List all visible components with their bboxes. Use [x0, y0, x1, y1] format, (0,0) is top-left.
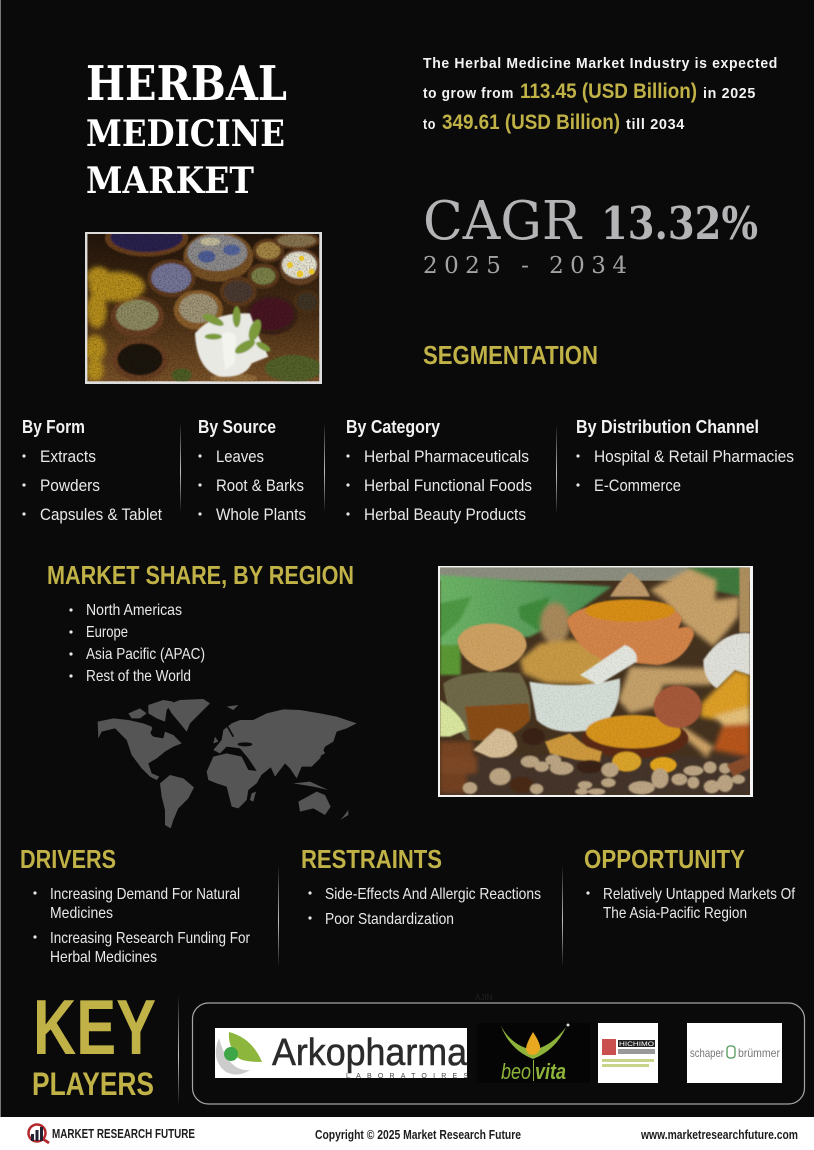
market growth statement — [423, 55, 778, 134]
CAGR figure: CAGR — [423, 191, 583, 252]
logo: Hichimo — [598, 1023, 658, 1083]
panel: drivers: Increasing Demand For Natural — [50, 886, 240, 903]
CAGR figure: 2025 - 2034 — [423, 253, 627, 279]
photo grain — [440, 567, 750, 795]
logo: beo vita: beo — [501, 1059, 531, 1084]
panel: restraints: Side-Effects And Allergic Reactions — [325, 886, 541, 903]
heading: market share by region: MARKET SHARE, BY REGION — [47, 560, 354, 590]
panel: drivers — [20, 844, 279, 967]
column: by source: Root & Barks — [216, 476, 304, 495]
heading: key players: KEY — [33, 983, 156, 1071]
column: by category: Herbal Functional Foods — [364, 476, 532, 495]
footer — [0, 1117, 814, 1150]
panel: drivers: DRIVERS — [20, 844, 116, 874]
panel: restraints: RESTRAINTS — [301, 844, 442, 874]
market growth statement: 113.45 (USD Billion) — [520, 80, 697, 103]
logo: beo vita — [477, 1023, 590, 1084]
segmentation columns — [22, 417, 794, 524]
panel: opportunity — [584, 844, 795, 922]
panel: restraints: Poor Standardization — [325, 911, 454, 928]
panel: drivers: Medicines — [50, 905, 113, 922]
logo: Arkopharma: Arkopharma — [272, 1032, 468, 1074]
region list: Asia Pacific (APAC) — [86, 646, 205, 663]
column: by distribution channel — [576, 417, 794, 495]
column: by category: Herbal Pharmaceuticals — [364, 447, 529, 466]
panel: drivers: Herbal Medicines — [50, 949, 157, 966]
region list: Rest of the World — [86, 668, 191, 685]
column: by form: Capsules & Tablet — [40, 505, 162, 524]
world map — [98, 699, 357, 828]
photo: bowls of herbs — [84, 220, 322, 384]
panel: key player logos — [192, 993, 804, 1104]
column: by source: Leaves — [216, 447, 264, 466]
column: by source: Whole Plants — [216, 505, 306, 524]
title — [86, 56, 287, 202]
column: by form: By Form — [22, 417, 85, 437]
column: by category — [346, 417, 532, 524]
panel: key player logos: AJIN — [475, 993, 493, 1002]
icon: market research future logo — [28, 1124, 49, 1143]
column: by distribution channel: Hospital & Retail Pharmacies — [594, 447, 794, 466]
logo: Hichimo: HICHIMO — [619, 1042, 654, 1048]
logo: beo vita: vita — [535, 1059, 566, 1084]
market growth statement: The Herbal Medicine Market Industry is expected — [423, 55, 778, 72]
column: by form: Powders — [40, 476, 100, 495]
market growth statement: till 2034 — [626, 116, 685, 133]
footer: MARKET RESEARCH FUTURE — [52, 1126, 195, 1141]
column: by category: By Category — [346, 417, 440, 437]
photo: turmeric and mortar — [438, 566, 753, 797]
title: MEDICINE — [86, 113, 285, 155]
logo: Arkopharma: LABORATOIRES — [346, 1073, 468, 1080]
heading: segmentation: SEGMENTATION — [423, 340, 598, 370]
logo: Arkopharma — [215, 1028, 468, 1080]
panel: restraints — [301, 844, 563, 967]
column: by category: Herbal Beauty Products — [364, 505, 526, 524]
region list — [69, 602, 205, 685]
footer: Copyright © 2025 Market Research Future — [315, 1127, 521, 1142]
column: by form — [22, 417, 162, 524]
column: by source: By Source — [198, 417, 276, 437]
heading: key players: PLAYERS — [32, 1066, 154, 1102]
logo: schaper brummer — [687, 1023, 782, 1083]
title: HERBAL — [86, 56, 287, 112]
logo: schaper brummer: schaper — [690, 1046, 724, 1060]
panel: drivers: Increasing Research Funding For — [50, 930, 251, 947]
CAGR figure — [423, 191, 758, 279]
photo grain — [87, 234, 319, 381]
region list: North Americas — [86, 602, 182, 619]
CAGR figure: 13.32% — [601, 197, 758, 250]
title: MARKET — [86, 160, 254, 202]
panel: opportunity: OPPORTUNITY — [584, 844, 745, 874]
heading: key players — [32, 983, 179, 1105]
market growth statement: to — [423, 116, 436, 133]
panel: opportunity: The Asia-Pacific Region — [603, 905, 747, 922]
market growth statement: to grow from — [423, 85, 514, 102]
region list: Europe — [86, 624, 128, 641]
logo: schaper brummer: brümmer — [738, 1046, 780, 1060]
column: by source — [198, 417, 306, 524]
market growth statement: 349.61 (USD Billion) — [442, 111, 620, 134]
column: by form: Extracts — [40, 447, 96, 466]
column: by distribution channel: E-Commerce — [594, 476, 681, 495]
column: by distribution channel: By Distribution Channel — [576, 417, 759, 437]
market growth statement: in 2025 — [703, 85, 756, 102]
